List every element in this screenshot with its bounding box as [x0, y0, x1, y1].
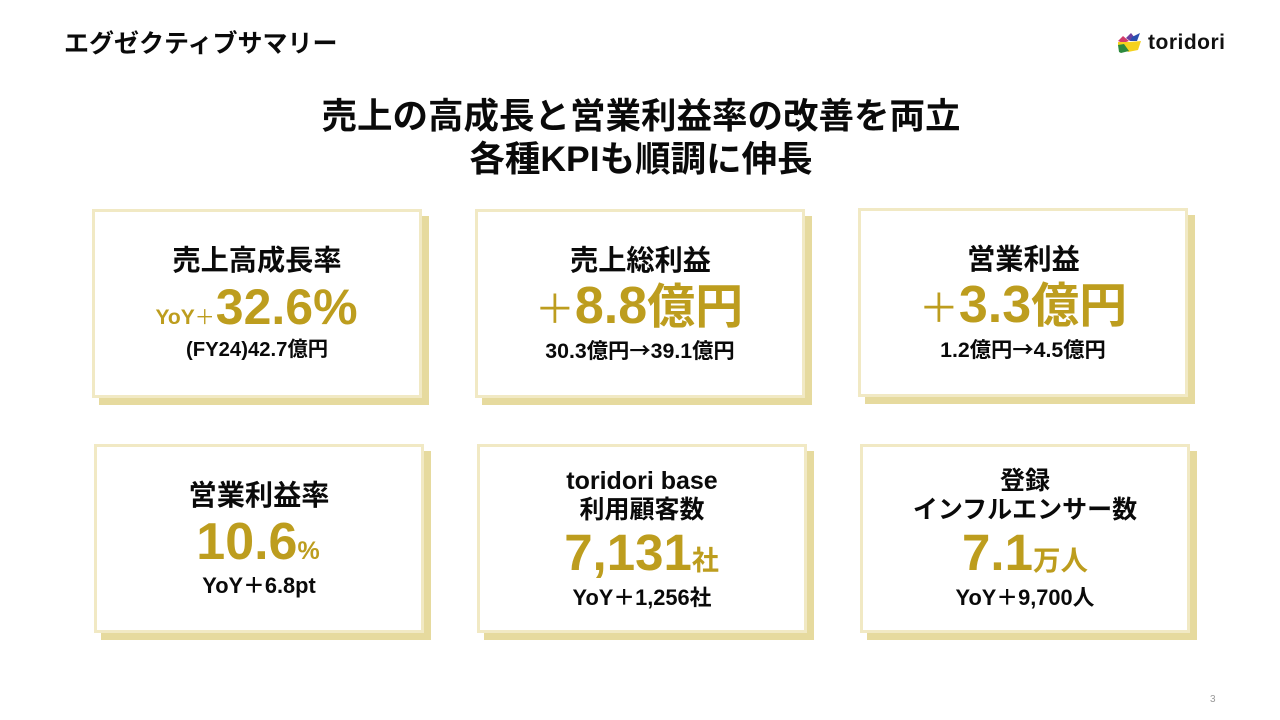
value: toridori base customers: 7,131社	[564, 524, 719, 581]
label: registered influencers: インフルエンサー数	[913, 496, 1137, 524]
logo: toridori: toridori	[1148, 31, 1226, 54]
label: toridori base customers	[566, 467, 718, 524]
label: toridori base customers: 利用顧客数	[579, 496, 705, 524]
label: gross profit: 売上総利益	[570, 244, 711, 276]
panel: sales growth rate	[92, 209, 422, 398]
label: operating margin: 営業利益率	[189, 479, 329, 511]
label: operating profit: 営業利益	[967, 243, 1080, 275]
panel: registered influencers	[860, 444, 1190, 633]
label: registered influencers	[913, 467, 1137, 524]
main title: 各種KPIも順調に伸長	[469, 139, 813, 179]
detail: toridori base customers: YoY＋1,256社	[573, 585, 711, 610]
detail: operating margin: YoY＋6.8pt	[202, 573, 316, 598]
main title: 売上の高成長と営業利益率の改善を両立	[321, 96, 961, 136]
value: operating margin: 10.6%	[196, 513, 320, 571]
label: sales growth rate: 売上高成長率	[172, 244, 342, 276]
panel: toridori base customers	[477, 444, 807, 633]
detail: registered influencers: YoY＋9,700人	[956, 585, 1094, 610]
value: sales growth rate: YoY＋32.6%	[155, 279, 358, 335]
label: toridori base customers: toridori base	[566, 467, 718, 495]
value: gross profit: ＋8.8億円	[535, 277, 743, 335]
detail: gross profit: 30.3億円→39.1億円	[545, 334, 735, 365]
value: operating profit: ＋3.3億円	[919, 276, 1127, 334]
label: registered influencers: 登録	[1000, 467, 1050, 495]
detail: sales growth rate: (FY24)42.7億円	[186, 339, 328, 361]
main title	[321, 96, 961, 179]
page number: 3	[1210, 694, 1216, 705]
panel: operating profit	[858, 208, 1188, 397]
detail: operating profit: 1.2億円→4.5億円	[940, 333, 1106, 364]
value: registered influencers: 7.1万人	[962, 524, 1088, 581]
page heading: エグゼクティブサマリー	[64, 30, 338, 58]
panel: gross profit	[475, 209, 805, 398]
panel: operating margin	[94, 444, 424, 633]
